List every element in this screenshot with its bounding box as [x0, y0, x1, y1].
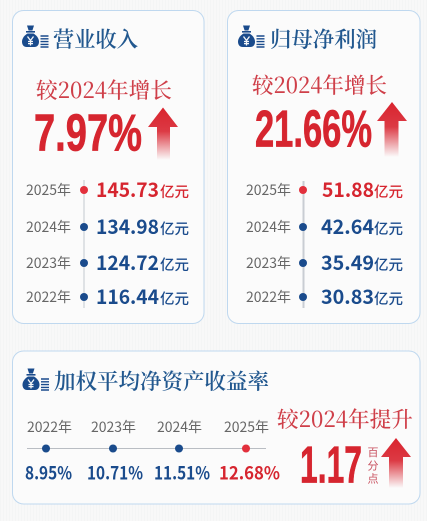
timeline: net profit: 30.83 [321, 281, 374, 310]
icon: money bag [22, 368, 49, 390]
heading: revenue: 营业收入 [53, 23, 138, 54]
timeline: net profit: 2024年 [246, 217, 291, 237]
improvement value: 1.17 [300, 436, 362, 494]
unit: percentage points: 分 [368, 458, 378, 474]
timeline: return on equity: 2022年 [27, 417, 72, 437]
timeline: revenue [26, 174, 189, 310]
timeline: net profit: 亿元 [374, 218, 403, 239]
panel: net profit [228, 10, 420, 324]
timeline: return on equity: 2023年 [91, 417, 136, 437]
timeline: revenue: 2025年 [26, 180, 71, 200]
timeline: net profit: 35.49 [321, 247, 374, 276]
timeline: net profit: 2025年 [246, 180, 291, 200]
timeline: net profit: 2023年 [246, 253, 291, 273]
timeline: return on equity: 2025年 [224, 417, 269, 437]
growth label: 较2024年增长 [36, 74, 172, 105]
timeline: return on equity: 2024年 [157, 417, 202, 437]
timeline: return on equity: 8.95% [25, 460, 72, 486]
timeline: return on equity [25, 417, 280, 486]
panel: return on equity [12, 351, 420, 504]
timeline: return on equity: 10.71% [87, 460, 143, 486]
timeline: return on equity: 12.68% [219, 460, 280, 486]
timeline: revenue: 2023年 [26, 253, 71, 273]
timeline: net profit: 42.64 [321, 211, 374, 240]
timeline: revenue: 2022年 [26, 287, 71, 307]
timeline: revenue: 亿元 [160, 288, 189, 309]
icon: money bag [22, 26, 48, 47]
timeline: net profit: 亿元 [374, 288, 403, 309]
growth value: 7.97% [34, 104, 142, 162]
icon: up arrow [377, 102, 407, 157]
unit: percentage points: 点 [368, 470, 378, 486]
icon: money bag [238, 26, 264, 47]
timeline: revenue: 145.73 [96, 174, 159, 203]
timeline: revenue: 亿元 [160, 218, 189, 239]
unit: percentage points [368, 444, 378, 486]
panel: revenue [12, 10, 204, 324]
timeline: revenue: 2024年 [26, 217, 71, 237]
growth value: 21.66% [255, 100, 372, 158]
heading: net profit: 归母净利润 [270, 23, 377, 54]
timeline: return on equity: 11.51% [154, 460, 210, 486]
icon: up arrow [381, 438, 411, 488]
unit: percentage points: 百 [368, 444, 378, 460]
growth label: 较2024年增长 [252, 69, 387, 100]
timeline: net profit: 51.88 [322, 174, 374, 203]
timeline: revenue: 134.98 [96, 211, 159, 240]
timeline: net profit: 亿元 [374, 254, 403, 275]
timeline: revenue: 124.72 [96, 247, 159, 276]
improvement label: 较2024年提升 [277, 403, 413, 434]
timeline: net profit: 亿元 [374, 181, 403, 202]
timeline: revenue: 亿元 [160, 254, 189, 275]
timeline: net profit [246, 174, 403, 310]
timeline: net profit: 2022年 [246, 287, 291, 307]
heading: return on equity: 加权平均净资产收益率 [54, 365, 269, 396]
icon: up arrow [148, 108, 178, 160]
timeline: revenue: 亿元 [160, 181, 189, 202]
timeline: revenue: 116.44 [96, 281, 159, 310]
